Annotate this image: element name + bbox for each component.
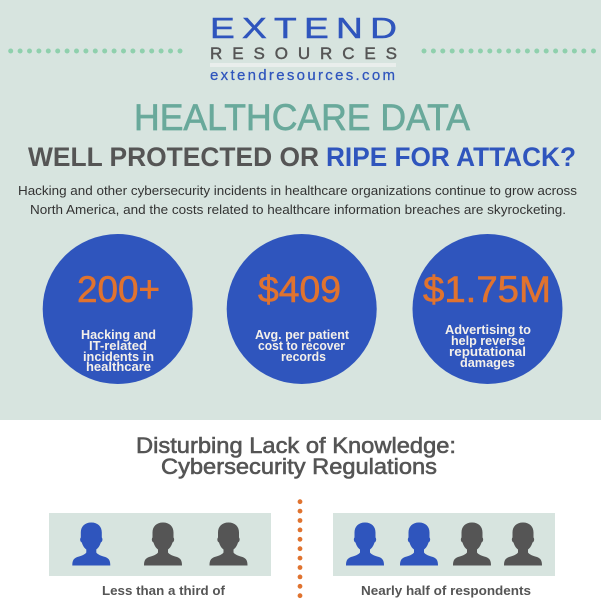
stat value: 200+ — [77, 269, 160, 310]
stat value: $409 — [258, 269, 341, 310]
stat label: Avg. per patient — [255, 328, 350, 342]
caption right: Nearly half of respondents — [361, 583, 531, 598]
stat label: IT-related — [89, 339, 147, 353]
stat circle: $1.75M — [412, 234, 562, 384]
stat label: Advertising to — [445, 323, 531, 337]
section heading: Cybersecurity Regulations — [161, 454, 437, 479]
title — [28, 97, 576, 172]
dotted vertical divider — [298, 499, 302, 598]
icon: grey person — [504, 522, 542, 566]
dotted divider right — [422, 48, 596, 54]
section heading: Disturbing Lack of Knowledge: — [136, 433, 456, 458]
icon: blue person — [346, 522, 384, 566]
icon: grey person — [453, 522, 491, 566]
stat label: cost to recover — [258, 339, 345, 353]
section heading — [136, 433, 456, 479]
background: top section — [0, 0, 601, 420]
website address: extendresources.com — [210, 67, 395, 84]
icon: blue person — [72, 522, 110, 566]
title line 1: HEALTHCARE DATA — [134, 97, 470, 138]
dotted divider left — [8, 48, 183, 54]
logo underline — [210, 63, 396, 67]
stat label — [81, 328, 156, 374]
stat circle: $409 — [227, 234, 377, 384]
logo wordmark: Extend: EXTEND — [210, 13, 397, 45]
logo — [210, 13, 397, 84]
panel: less than a third — [49, 513, 271, 576]
intro text: North America, and the costs related to healthcare information breaches are skyrocketing. — [30, 202, 566, 217]
stat label: reputational — [449, 345, 526, 359]
stat label: damages — [460, 356, 515, 370]
caption left: Less than a third of — [102, 583, 226, 598]
stat label — [255, 328, 350, 364]
title line 2 blue: RIPE FOR ATTACK? — [326, 142, 576, 172]
stat label — [445, 323, 531, 370]
intro text: Hacking and other cybersecurity incidents in healthcare organizations continue to grow across — [18, 183, 578, 198]
stat value: $1.75M — [423, 269, 551, 310]
icon: grey person — [144, 522, 182, 566]
logo wordmark: Resources: RESOURCES — [210, 44, 397, 63]
panel: nearly half — [333, 513, 555, 576]
title line 2 grey: WELL PROTECTED OR — [28, 142, 319, 172]
stat label: healthcare — [86, 360, 151, 374]
stat label: incidents in — [83, 350, 154, 364]
stat label: Hacking and — [81, 328, 156, 342]
icon: grey person — [210, 522, 248, 566]
intro text — [18, 183, 578, 217]
stat label: help reverse — [451, 334, 525, 348]
stat circle: 200+ — [43, 234, 193, 384]
stat label: records — [281, 350, 326, 364]
icon: blue person — [400, 522, 438, 566]
